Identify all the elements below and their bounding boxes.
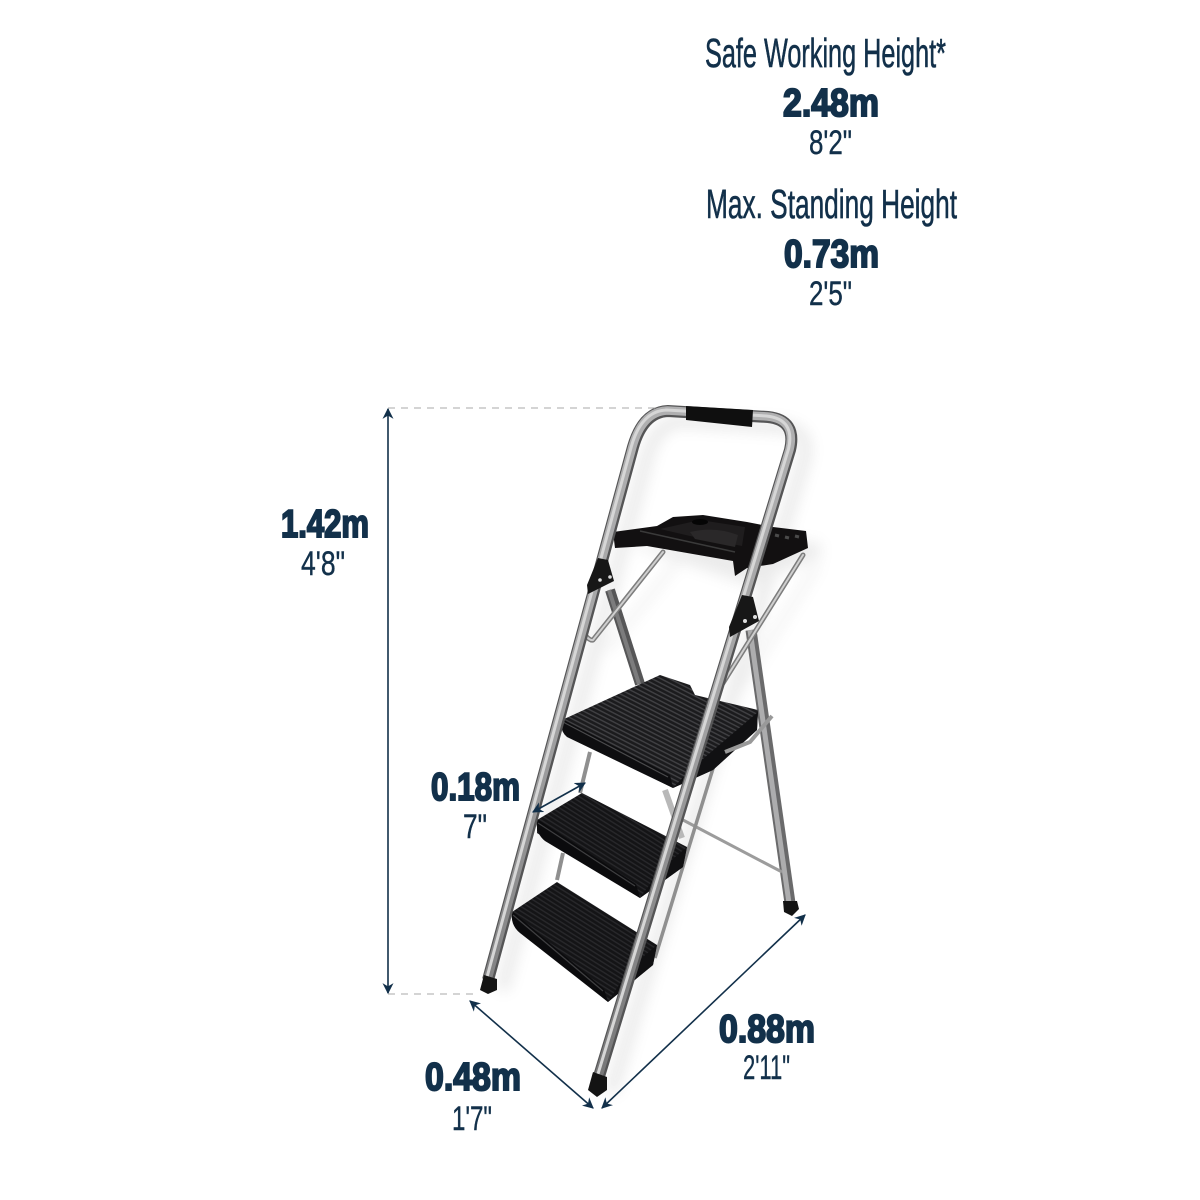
step depth dimension — [431, 766, 585, 846]
connecting rods — [557, 752, 715, 958]
ladder illustration — [480, 406, 821, 1097]
ladder feet — [480, 901, 799, 1097]
top step — [561, 675, 758, 788]
depth dimension — [602, 915, 815, 1108]
right hinge bracket — [729, 595, 759, 637]
width dimension: 1'7" — [452, 1100, 492, 1138]
width dimension — [425, 1001, 593, 1138]
width dimension: 0.48m — [425, 1056, 521, 1099]
left hinge bracket — [587, 558, 614, 594]
middle step — [537, 793, 687, 898]
max standing height block: Max. Standing Height — [706, 181, 957, 227]
step depth dimension: 7" — [463, 808, 487, 846]
bottom step — [512, 882, 657, 1002]
max standing height block — [706, 181, 957, 313]
depth dimension: 2'11" — [743, 1049, 790, 1087]
height dimension — [281, 408, 665, 994]
safe working height block: 8'2" — [809, 124, 852, 162]
tool tray — [613, 515, 808, 576]
safe working height block: Safe Working Height* — [705, 30, 946, 76]
safe working height block — [705, 30, 946, 162]
depth dimension: 0.88m — [719, 1008, 815, 1051]
max standing height block: 0.73m — [784, 233, 879, 276]
main frame tube — [486, 410, 791, 1083]
rear legs — [609, 590, 790, 903]
safe working height block: 2.48m — [783, 82, 879, 125]
height dimension: 1.42m — [281, 503, 369, 546]
height dimension: 4'8" — [301, 545, 345, 583]
rear cross brace — [683, 820, 782, 872]
max standing height block: 2'5" — [809, 275, 852, 313]
top step latch — [725, 716, 772, 752]
hand grip — [686, 406, 753, 427]
step depth dimension: 0.18m — [431, 766, 520, 809]
soft shadow — [502, 421, 821, 1093]
tray braces — [585, 552, 803, 683]
